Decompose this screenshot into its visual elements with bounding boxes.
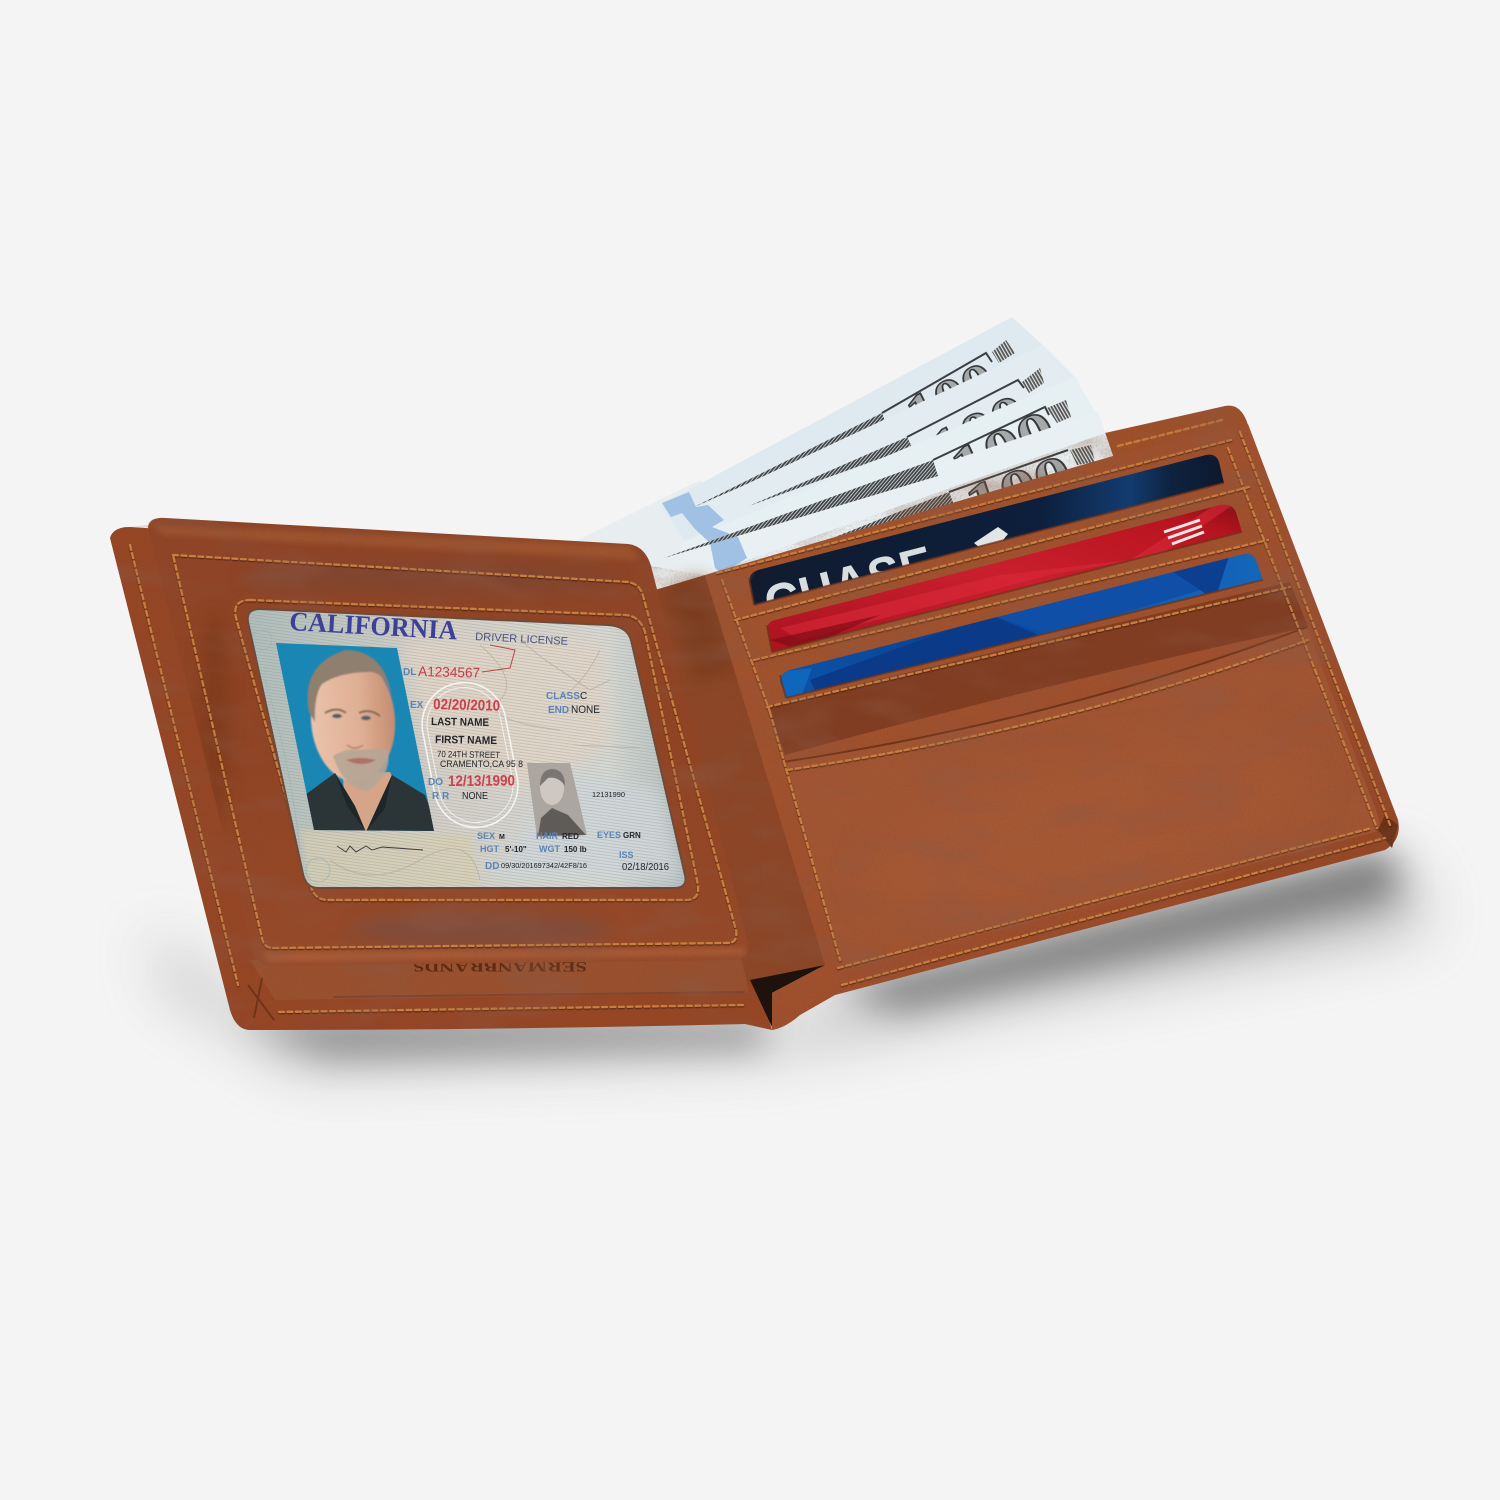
license text: M [499, 834, 505, 841]
map contour lines [252, 630, 640, 882]
card in third slot [780, 554, 1263, 698]
California driver license in clear window [248, 610, 684, 887]
card in top slot [749, 454, 1224, 605]
banknotes [572, 317, 1118, 600]
license text: 12/13/1990 [448, 772, 515, 790]
license text: CALIFORNIA [289, 606, 459, 645]
license text: 12131990 [592, 792, 625, 799]
license text: CLASS [546, 691, 580, 702]
license text: FIRST NAME [435, 734, 497, 747]
flap wear patches [150, 525, 745, 962]
first bill: 100 [897, 350, 1004, 442]
license text: LAST NAME [431, 716, 489, 729]
leather grain and mottling overlay [100, 400, 1410, 1040]
third bill [680, 377, 1100, 590]
license text: A1234567 [418, 663, 481, 681]
curved front pocket [783, 627, 1379, 970]
license text: DD [485, 861, 499, 872]
hologram oval [421, 682, 519, 828]
license text: DO [428, 777, 443, 788]
license text: HGT [480, 844, 500, 854]
license text: NONE [571, 704, 600, 716]
license text: EYES [597, 830, 621, 840]
license text: EX [410, 700, 424, 711]
license text: 5'-10" [505, 845, 527, 854]
license text: SEX [477, 831, 495, 841]
ghost portrait [527, 763, 587, 837]
ID flap [148, 518, 748, 966]
third bill engraved wedge [664, 460, 938, 558]
license text: HAIR [536, 831, 558, 841]
stitching on right leaf [717, 432, 1390, 985]
wallet illustration [110, 317, 1443, 1096]
license text: DRIVER LICENSE [475, 631, 568, 648]
leaf base [705, 424, 1399, 1030]
brand deboss: SERMANBRANDS [413, 958, 587, 974]
license text: C [580, 691, 587, 702]
second bill [700, 345, 1078, 590]
license text: WGT [539, 844, 560, 854]
first bill [660, 317, 1046, 590]
license text: GRN [623, 831, 641, 840]
license text: NONE [462, 791, 488, 802]
drop shadows [150, 850, 1430, 1065]
third bill: 100 [942, 400, 1064, 497]
card background [248, 610, 684, 887]
blue currency strap [662, 492, 747, 574]
license text: CRAMENTO,CA 95 8 [440, 759, 523, 769]
fourth bill [680, 412, 1118, 600]
license text: ISS [619, 850, 634, 860]
card in second slot [767, 504, 1242, 652]
dark middle pocket [767, 582, 1308, 755]
right wallet leaf [705, 424, 1399, 1030]
license text: END [548, 705, 569, 716]
back panel of right wallet leaf [1105, 406, 1265, 480]
rear bill [572, 480, 760, 586]
hinge gap [750, 965, 825, 1027]
signature [337, 846, 423, 852]
left wallet leaf [110, 518, 838, 1030]
slot edge shadows [749, 483, 1263, 698]
license window edge [248, 609, 686, 888]
portrait photo [276, 643, 434, 831]
license text: 09/30/201697342/42F8/16 [501, 863, 587, 870]
license text: 02/18/2016 [622, 862, 669, 873]
license text: R R [432, 791, 450, 802]
license text [289, 606, 669, 873]
second bill: 100 [921, 384, 1036, 479]
license text: 02/20/2010 [433, 696, 500, 715]
license text: 70 24TH STREET [437, 749, 501, 760]
license text: RED [562, 832, 579, 841]
license text: 150 lb [564, 845, 587, 854]
license text: DL [403, 667, 416, 678]
card in top slot: CHASE [759, 536, 940, 635]
spine [655, 575, 835, 982]
rear leather layer [110, 527, 772, 1030]
fourth bill: 100 [958, 444, 1079, 533]
stitching on left leaf [130, 545, 838, 1012]
